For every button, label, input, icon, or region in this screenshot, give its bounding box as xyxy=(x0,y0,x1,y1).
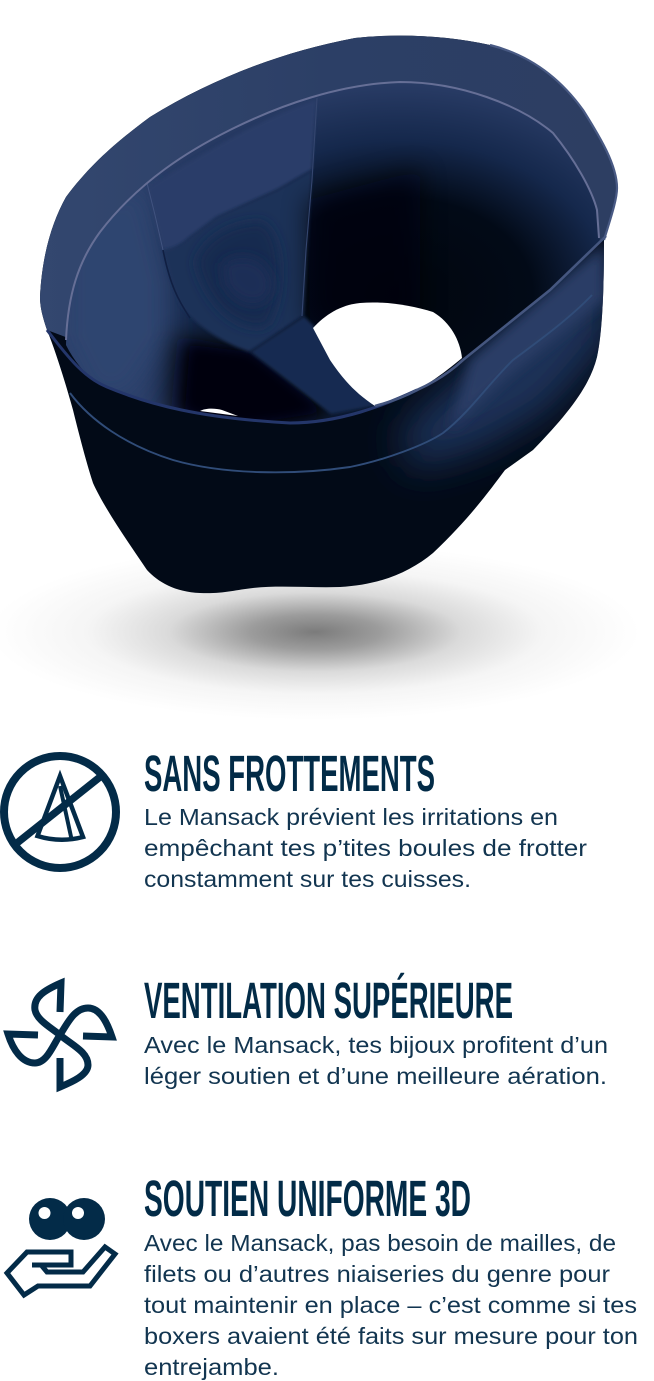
body text: filets ou d’autres niaiseries du genre pour xyxy=(144,1261,610,1287)
outer right rim edge xyxy=(490,45,617,240)
right dark region next to pouch xyxy=(308,170,420,330)
body text: entrejambe. xyxy=(144,1354,279,1380)
body text xyxy=(144,1032,608,1089)
pouch cup xyxy=(163,170,312,352)
pouch panel upper xyxy=(162,104,315,248)
garment outer silhouette xyxy=(30,30,630,600)
feature: sans frottements xyxy=(4,745,587,892)
garment interior xyxy=(66,96,600,421)
body text xyxy=(144,1230,638,1380)
body text: constamment sur tes cuisses. xyxy=(144,866,471,892)
body text: Le Mansack prévient les irritations en xyxy=(144,804,558,830)
icon: hand holding two balls xyxy=(7,1198,115,1295)
body text: léger soutien et d’une meilleure aération. xyxy=(144,1063,607,1089)
central strap xyxy=(250,316,375,414)
main leg opening xyxy=(313,302,462,406)
body text: tout maintenir en place – c’est comme si tes xyxy=(144,1292,637,1318)
body text: Avec le Mansack, tes bijoux profitent d’un xyxy=(144,1032,608,1058)
ground shadow xyxy=(0,544,640,720)
small leg opening xyxy=(200,409,238,416)
left inner panel xyxy=(66,202,178,382)
waistband inner rim xyxy=(40,36,617,360)
lower dark well xyxy=(170,335,335,432)
body text: empêchant tes p’tites boules de frotter xyxy=(144,835,587,861)
feature: ventilation superieure xyxy=(8,972,608,1089)
icon: pinwheel xyxy=(8,983,112,1087)
body text: Avec le Mansack, pas besoin de mailles, de xyxy=(144,1230,616,1256)
body text: boxers avaient été faits sur mesure pour ton xyxy=(144,1323,638,1349)
inner seam line xyxy=(66,82,599,340)
pouch seams xyxy=(163,250,190,318)
product photo: boxer waistband with shadow xyxy=(40,36,618,698)
feature: soutien uniforme 3d xyxy=(7,1170,638,1380)
front rim edge xyxy=(47,330,417,423)
icon: crossed-out cone xyxy=(4,756,116,868)
front seam line xyxy=(70,295,592,472)
body text xyxy=(144,804,587,892)
